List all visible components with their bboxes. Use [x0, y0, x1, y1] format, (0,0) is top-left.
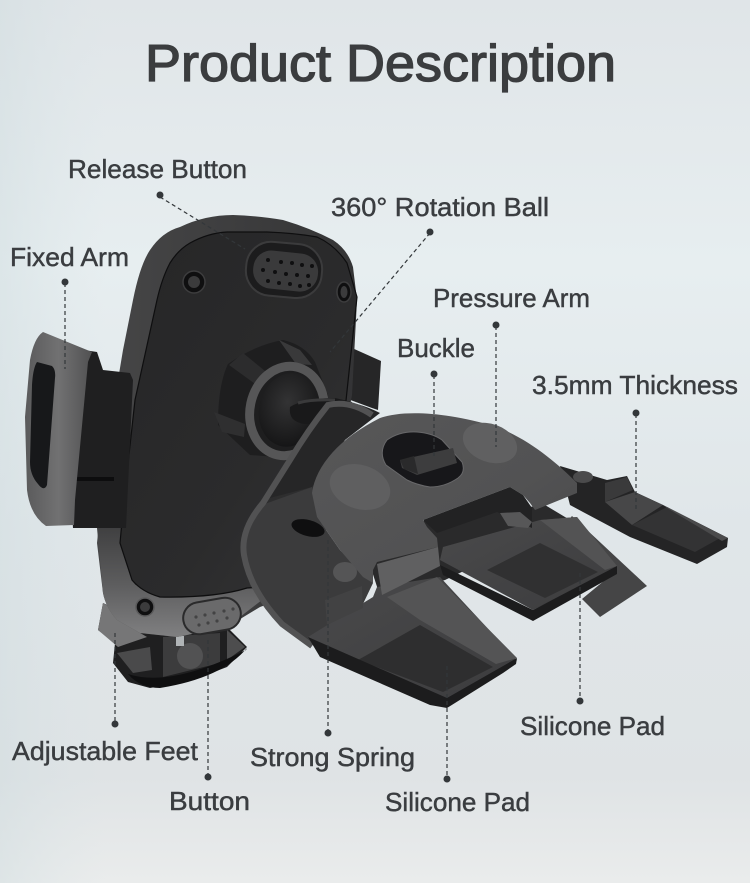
release button [244, 240, 324, 300]
silicone pad right [632, 507, 722, 552]
label: Strong Spring: Strong Spring [250, 742, 415, 772]
label: Fixed Arm: Fixed Arm [10, 242, 129, 272]
label: 360 Rotation Ball [330, 192, 549, 352]
buckle window [382, 432, 463, 487]
product: CD clip [243, 402, 728, 708]
top plate [312, 413, 577, 595]
fixed arm [25, 332, 133, 528]
left tongue [308, 577, 517, 708]
label: Pressure Arm: Pressure Arm [433, 283, 590, 313]
title: Product Description [145, 35, 616, 93]
label: Release Button [68, 154, 247, 249]
label: Silicone Pad right: Silicone Pad [520, 711, 665, 741]
label: Pressure Arm [433, 283, 590, 447]
silicone pad middle [487, 543, 598, 598]
label: Adjustable Feet: Adjustable Feet [12, 736, 199, 766]
right tongue [560, 466, 728, 564]
label: 3.5mm Thickness [532, 370, 738, 510]
bottom button [181, 595, 243, 637]
ball stem [290, 398, 352, 424]
label: Button: Button [169, 786, 250, 816]
screws [136, 271, 351, 616]
label: Silicone Pad bottom: Silicone Pad [385, 787, 530, 817]
spring arc and back plate [243, 402, 380, 646]
middle tongue [440, 516, 647, 621]
label: Fixed Arm [10, 242, 129, 369]
label: 360 Rotation Ball: 360° Rotation Ball [331, 192, 549, 222]
label: Release Button: Release Button [68, 154, 247, 184]
inner panel [120, 232, 357, 597]
housing shell [97, 215, 357, 637]
foot assembly [98, 603, 247, 688]
label: Silicone Pad right [520, 573, 665, 741]
label: Adjustable Feet [12, 633, 199, 766]
label: Button [169, 640, 250, 816]
product: phone holder [25, 215, 381, 688]
label: Buckle: Buckle [397, 333, 475, 363]
spring block [325, 586, 363, 625]
label: Silicone Pad bottom [385, 666, 530, 817]
label: Strong Spring [250, 540, 415, 772]
label: Buckle [397, 333, 475, 458]
label: 3.5mm Thickness: 3.5mm Thickness [532, 370, 738, 400]
right arm [345, 348, 381, 410]
rotation ball mount [214, 340, 352, 463]
plate backing [370, 505, 570, 596]
silicone pad left [358, 625, 493, 692]
